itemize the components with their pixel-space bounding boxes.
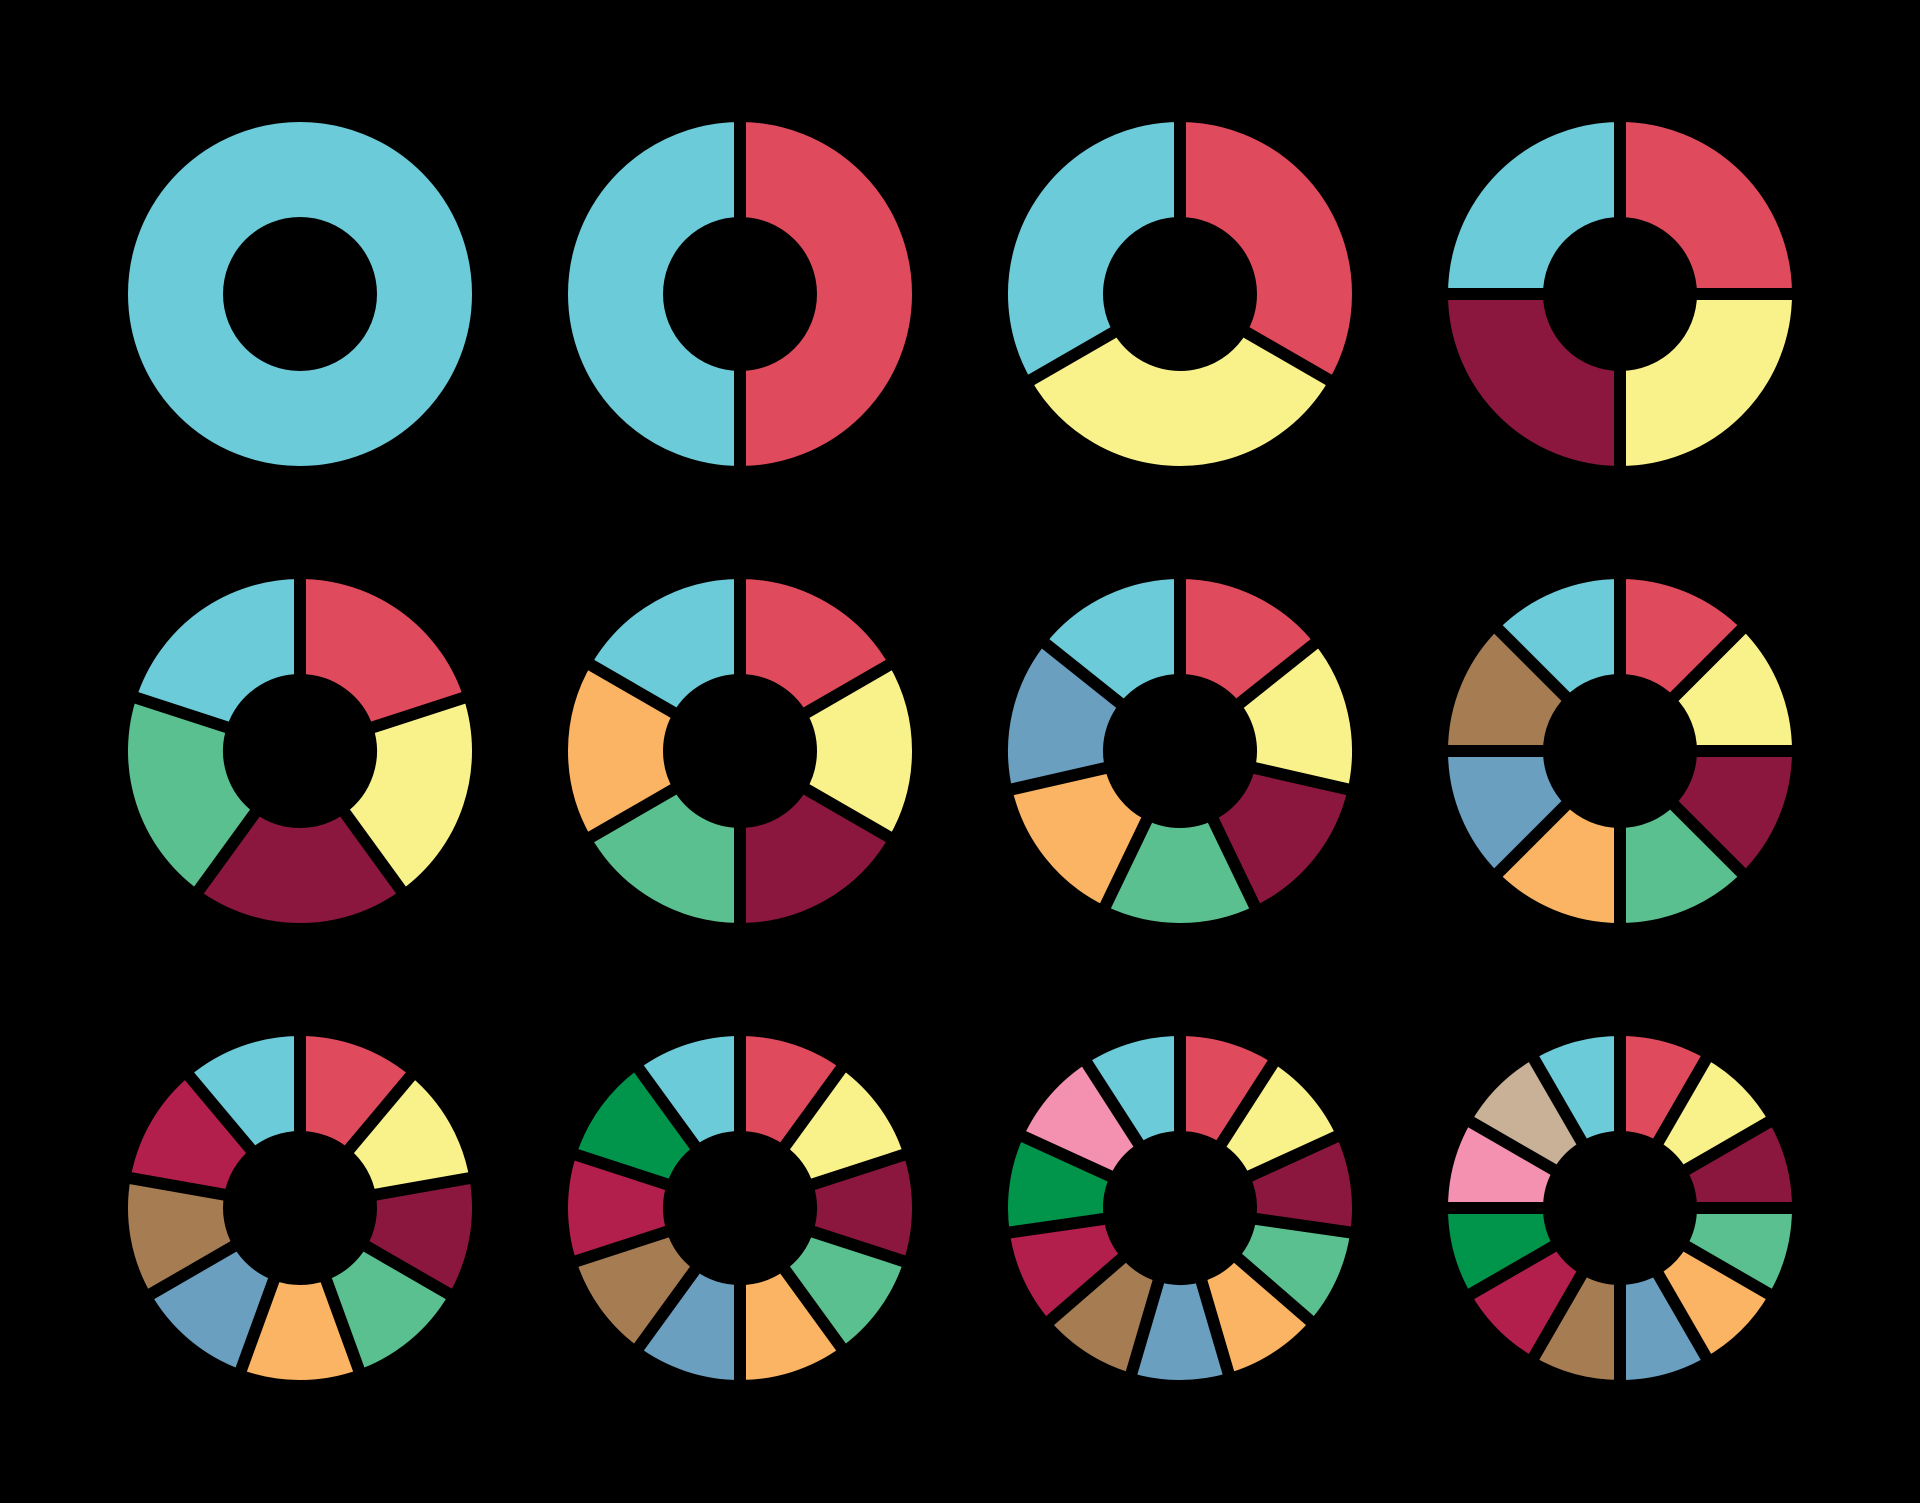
donut 5: five segments [126, 571, 474, 925]
donut 6: six segments [570, 571, 910, 931]
donut 12: twelve segments [1440, 1028, 1800, 1388]
donut 10: ten segments [566, 1028, 914, 1388]
donut 4: four segments [1440, 114, 1800, 474]
donut 11: eleven segments [1002, 1028, 1358, 1384]
donut 3: three segments [1010, 114, 1350, 464]
donut 1: single segment [176, 170, 424, 418]
donut 7: seven segments [1005, 571, 1355, 926]
donut 8: eight segments [1440, 571, 1800, 931]
donut 9: nine segments [123, 1028, 477, 1383]
donut 2: two segments [616, 114, 864, 474]
